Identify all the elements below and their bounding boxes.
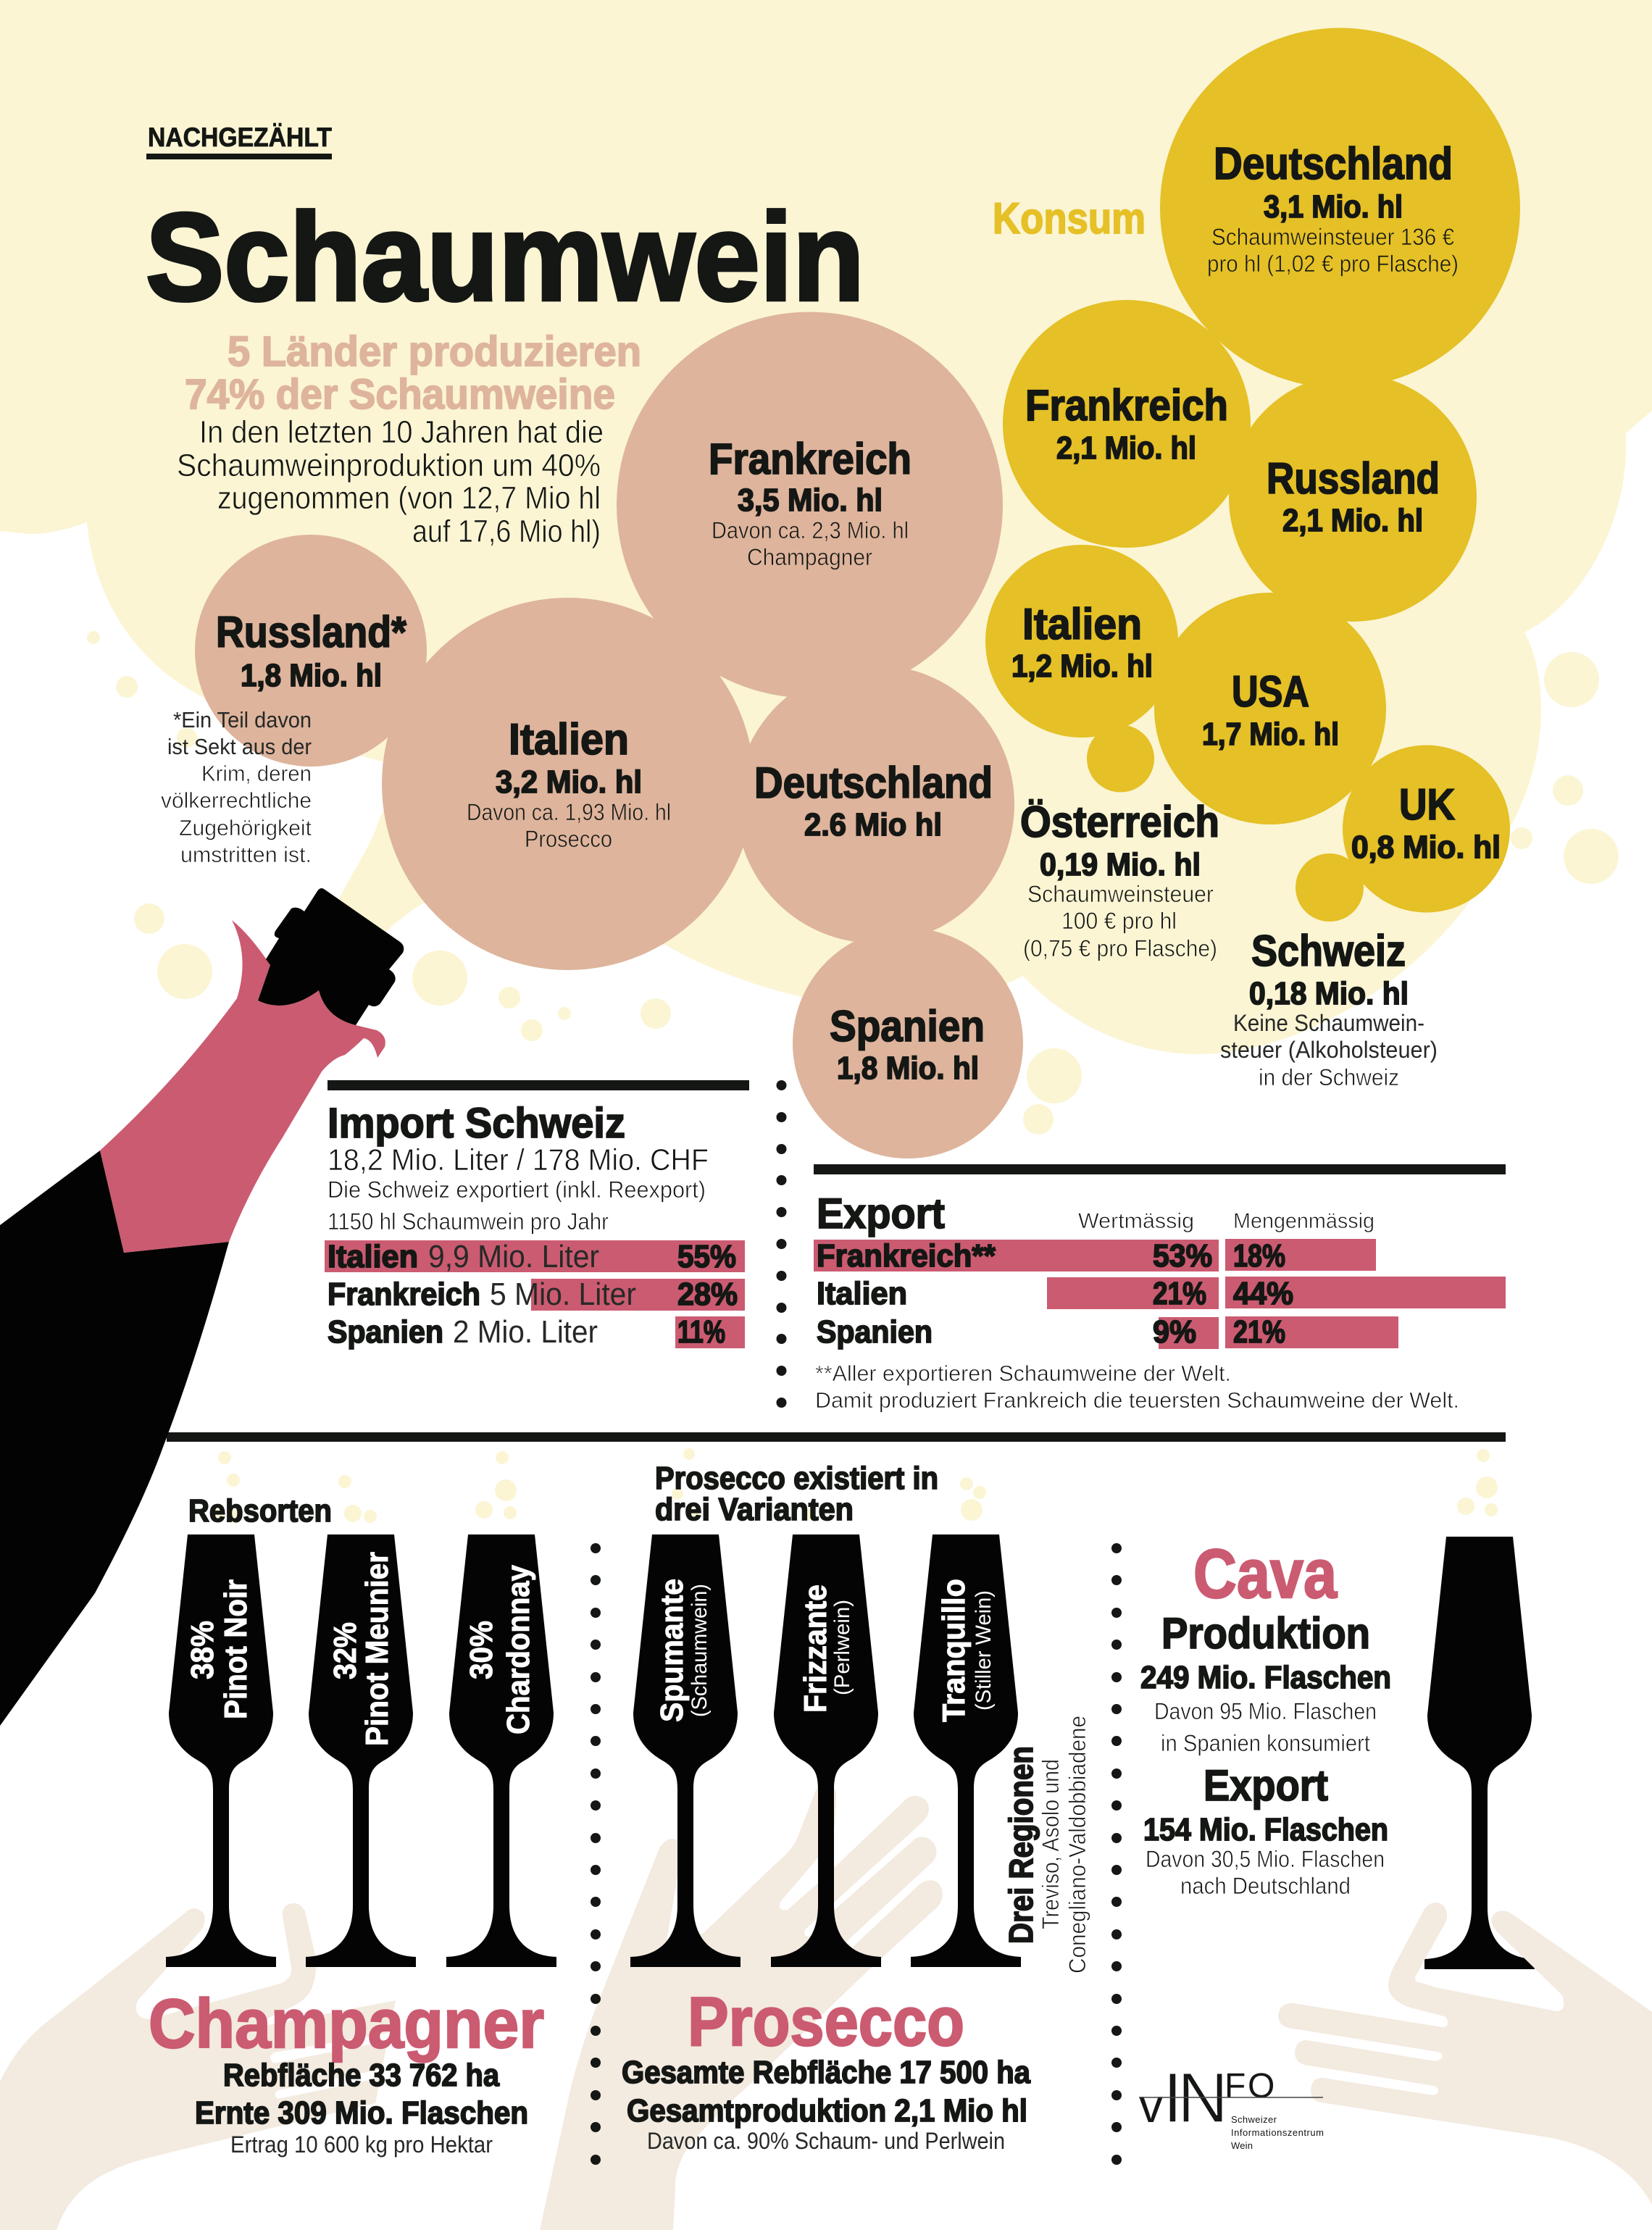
production circle: Italien: Davon ca. 1,93 Mio. hl [467, 799, 671, 825]
text block: Champagner [149, 1985, 544, 2158]
glass: Chardonnay: Chardonnay [501, 1565, 536, 1734]
import bar: Spanien: 11% [677, 1314, 725, 1350]
production circle: Russland: 1,8 Mio. hl [241, 658, 382, 693]
glass: Frizzante [771, 1534, 881, 1967]
consumption circle: Russland: 2,1 Mio. hl [1282, 503, 1423, 538]
Rebsorten label: Rebsorten [188, 1493, 332, 1529]
glass: Frizzante: Frizzante [798, 1584, 833, 1713]
glass: Pinot Noir: Pinot Noir [218, 1579, 254, 1719]
panel: Import Schweiz [325, 1080, 749, 1350]
glass: Pinot Meunier: Pinot Meunier [359, 1552, 395, 1746]
consumption: Schweiz: in der Schweiz [1259, 1064, 1399, 1090]
Russland footnote: Krim, deren [201, 761, 312, 786]
Prosecco varieties label: drei Varianten [655, 1492, 854, 1527]
consumption: Österreich: Schaumweinsteuer [1027, 881, 1214, 907]
Russland footnote [161, 707, 312, 867]
subheading [185, 328, 641, 418]
Russland footnote: umstritten ist. [180, 842, 312, 867]
production circle: Spanien: Spanien [830, 1002, 985, 1051]
glass: Tranquillo [911, 1534, 1021, 1967]
production circle: Frankreich: Davon ca. 2,3 Mio. hl [712, 517, 909, 543]
export row: Italien [817, 1276, 1506, 1311]
consumption circle: Italien: 1,2 Mio. hl [1011, 648, 1153, 684]
export row: Italien: Italien [817, 1276, 907, 1311]
text block: Champagner: Ertrag 10 600 kg pro Hektar [230, 2131, 493, 2158]
Prosecco varieties label: Prosecco existiert in [655, 1461, 938, 1496]
glass: Pinot Meunier [306, 1534, 416, 1967]
export footnote: Damit produziert Frankreich die teuersten Schaumweine der Welt. [815, 1387, 1459, 1413]
production circle: Russland [195, 535, 427, 767]
text block: Prosecco: Gesamte Rebfläche 17 500 ha [622, 2055, 1030, 2090]
production circle: Italien: Italien [509, 715, 629, 764]
production circle: Russland: Russland* [216, 608, 407, 656]
middle hand [540, 1782, 943, 2230]
import bar: Frankreich: 28% [677, 1277, 738, 1312]
vINFO logo: v [1139, 2079, 1163, 2132]
panel: Import Schweiz: Import Schweiz [328, 1100, 625, 1147]
text block: Champagner: Rebfläche 33 762 ha [223, 2058, 499, 2093]
import bar: Italien: 55% [677, 1239, 736, 1274]
glass: Pinot Noir [166, 1534, 276, 1967]
glass: Chardonnay [446, 1534, 556, 1967]
text block: Cava: Export [1203, 1761, 1328, 1810]
production circle: Deutschland [736, 665, 1014, 943]
title: Schaumwein [146, 188, 864, 327]
Drei Regionen text: Conegliano-Valdobbiadene [1064, 1716, 1090, 1974]
text block: Prosecco: Prosecco [688, 1983, 964, 2060]
consumption circle: UK: UK [1399, 780, 1455, 829]
import bar: Frankreich: Frankreich [328, 1277, 480, 1312]
glass: Spumante [630, 1534, 741, 1967]
consumption circle: UK [1343, 745, 1510, 913]
bottle cork [258, 888, 404, 1025]
consumption: Österreich: (0,75 € pro Flasche) [1023, 935, 1217, 961]
intro paragraph: zugenommen (von 12,7 Mio hl [217, 480, 601, 516]
intro paragraph: auf 17,6 Mio hl) [412, 514, 601, 549]
panel: Import Schweiz: 18,2 Mio. Liter / 178 Mio. CHF [328, 1143, 709, 1177]
production circle: Frankreich: Frankreich [709, 435, 911, 483]
panel: Export: Mengenmässig [1233, 1209, 1374, 1233]
consumption circle: Frankreich: 2,1 Mio. hl [1056, 430, 1196, 466]
consumption circle: Italien: Italien [1022, 600, 1142, 648]
consumption circle: USA: 1,7 Mio. hl [1202, 717, 1339, 752]
Russland footnote: Zugehörigkeit [179, 815, 312, 840]
intro text block [177, 328, 641, 549]
bottle body [0, 1151, 229, 1726]
text block: Cava: Davon 95 Mio. Flaschen [1154, 1698, 1377, 1724]
glass: Spumante: Spumante [654, 1579, 690, 1722]
glass: Spumante: (Schaumwein) [688, 1584, 712, 1717]
glass: Chardonnay: 30% [464, 1621, 499, 1679]
cream foam background [0, 0, 1652, 1054]
consumption circle: Deutschland: Deutschland [1214, 139, 1453, 189]
Russland footnote: völkerrechtliche [161, 788, 312, 813]
production circle: Italien: 3,2 Mio. hl [496, 764, 642, 800]
export row: Frankreich: 53% [1153, 1238, 1212, 1274]
export row: Frankreich: Frankreich** [817, 1238, 996, 1274]
consumption: Österreich: 0,19 Mio. hl [1040, 847, 1201, 882]
consumption: Schweiz: Keine Schaumwein- [1233, 1010, 1424, 1036]
dotted divider: left [591, 1543, 601, 2165]
import bar: Italien: Italien [328, 1239, 418, 1274]
dotted divider: import/export [777, 1080, 787, 1408]
subheading: 74% der Schaumweine [185, 371, 615, 418]
consumption circle: Russland [1229, 374, 1477, 622]
Drei Regionen text: Drei Regionen [1002, 1746, 1040, 1944]
glass: Pinot Meunier: 32% [328, 1622, 363, 1679]
import bar: Frankreich [328, 1277, 745, 1312]
consumption: Schweiz: 0,18 Mio. hl [1249, 976, 1409, 1011]
text block: Prosecco [622, 1983, 1030, 2154]
heading: Konsum: Konsum [993, 194, 1146, 243]
intro paragraph [177, 414, 604, 549]
small foam bubbles [87, 631, 1619, 1524]
consumption circle: USA [1154, 593, 1386, 824]
panel: Export [814, 1164, 1506, 1413]
export row: Spanien: 9% [1153, 1314, 1196, 1350]
export row: Spanien: Spanien [817, 1314, 933, 1350]
right hand [1278, 1903, 1652, 2205]
vINFO logo [1139, 2058, 1324, 2151]
text block: Cava: nach Deutschland [1180, 1873, 1351, 1899]
panel: Import Schweiz: Die Schweiz exportiert (inkl. Reexport) [328, 1177, 706, 1203]
consumption circle: Russland: Russland [1267, 454, 1440, 503]
glass: Pinot Noir: 38% [185, 1621, 220, 1679]
Prosecco varieties label [655, 1461, 938, 1527]
export row: Italien: 44% [1233, 1276, 1293, 1311]
panel: Export: Wertmässig [1078, 1209, 1194, 1233]
Drei Regionen text [1002, 1716, 1090, 1974]
glass: Cava [1424, 1537, 1535, 1969]
consumption: Österreich: 100 € pro hl [1061, 908, 1177, 934]
champagne bottle [0, 888, 404, 1726]
glass: Tranquillo: (Stiller Wein) [972, 1590, 996, 1711]
consumption: Österreich [1020, 724, 1219, 961]
consumption: Schweiz [1220, 853, 1438, 1090]
consumption circle: Deutschland [1160, 28, 1520, 388]
consumption circle: Deutschland: Schaumweinsteuer 136 € [1211, 224, 1454, 250]
production circle: Frankreich: Champagner [747, 544, 872, 570]
vINFO logo: IN [1163, 2058, 1228, 2137]
consumption circle: Frankreich [1003, 300, 1251, 548]
vINFO logo: FO [1225, 2067, 1275, 2105]
vINFO logo: Schweizer [1231, 2114, 1277, 2125]
text block: Champagner: Champagner [149, 1985, 544, 2063]
import bar: Spanien: Spanien [328, 1314, 443, 1350]
consumption circle: Deutschland: pro hl (1,02 € pro Flasche) [1207, 251, 1459, 277]
export row: Spanien [817, 1314, 1398, 1350]
production circle: Deutschland: Deutschland [754, 759, 993, 807]
export footnote: **Aller exportieren Schaumweine der Welt. [815, 1361, 1231, 1386]
text block: Cava: Davon 30,5 Mio. Flaschen [1146, 1846, 1385, 1872]
production circle: Spanien: 1,8 Mio. hl [837, 1051, 979, 1086]
Drei Regionen text: Treviso, Asolo und [1038, 1759, 1064, 1929]
text block: Prosecco: Gesamtproduktion 2,1 Mio hl [627, 2093, 1027, 2129]
text block: Cava: Produktion [1161, 1609, 1370, 1658]
text block: Cava: Cava [1193, 1535, 1338, 1613]
consumption circle: Frankreich: Frankreich [1025, 381, 1228, 430]
kicker: Nachgezählt: NACHGEZÄHLT [148, 122, 332, 152]
text block: Prosecco: Davon ca. 90% Schaum- und Perlwein [647, 2128, 1005, 2154]
consumption circle: Italien [985, 545, 1178, 738]
import bar: Frankreich: 5 Mio. Liter [490, 1277, 636, 1312]
text block: Champagner: Ernte 309 Mio. Flaschen [195, 2095, 528, 2131]
import bar: Spanien [328, 1314, 745, 1350]
import bar: Italien: 9,9 Mio. Liter [428, 1239, 599, 1274]
production circle: Italien: Prosecco [525, 826, 612, 852]
export row: Frankreich [814, 1238, 1376, 1274]
consumption: Schweiz: Schweiz [1251, 927, 1406, 975]
Russland footnote: ist Sekt aus der [167, 734, 312, 759]
production circle: Frankreich: 3,5 Mio. hl [738, 483, 883, 518]
Russland footnote: *Ein Teil davon [173, 707, 312, 732]
export row: Spanien: 21% [1233, 1314, 1285, 1350]
glass: Frizzante: (Perlwein) [830, 1600, 854, 1695]
text block: Cava: 154 Mio. Flaschen [1143, 1812, 1388, 1847]
consumption circle: UK: 0,8 Mio. hl [1351, 830, 1501, 865]
text block: Cava: 249 Mio. Flaschen [1140, 1660, 1391, 1695]
consumption circle: Deutschland: 3,1 Mio. hl [1264, 189, 1403, 225]
panel: Import Schweiz: 1150 hl Schaumwein pro Jahr [328, 1208, 609, 1235]
panel: Export: Export [817, 1190, 945, 1237]
text block: Cava [1140, 1535, 1391, 1899]
left hand [0, 1903, 396, 2230]
export footnote [815, 1361, 1459, 1413]
subheading: 5 Länder produzieren [228, 328, 641, 375]
import bar: Spanien: 2 Mio. Liter [453, 1314, 598, 1350]
dotted divider: right [1111, 1543, 1122, 2165]
consumption: Österreich: Österreich [1020, 798, 1219, 846]
import bar: Italien [325, 1239, 745, 1274]
consumption: Schweiz: steuer (Alkoholsteuer) [1220, 1037, 1438, 1063]
text block: Cava: in Spanien konsumiert [1161, 1730, 1370, 1756]
production circle: Spanien [793, 928, 1023, 1158]
glass: Tranquillo: Tranquillo [936, 1579, 972, 1722]
production circle: Frankreich [617, 312, 1003, 698]
production circle: Italien [382, 598, 754, 970]
intro paragraph: In den letzten 10 Jahren hat die [199, 414, 604, 450]
export row: Italien: 21% [1153, 1276, 1206, 1311]
consumption circle: USA: USA [1232, 667, 1309, 716]
intro paragraph: Schaumweinproduktion um 40% [177, 448, 601, 483]
vINFO logo: Informationszentrum [1231, 2127, 1324, 2138]
section rule [167, 1432, 1506, 1442]
bottle foil [100, 920, 385, 1253]
production circle: Deutschland: 2.6 Mio hl [804, 807, 942, 843]
export row: Frankreich: 18% [1233, 1238, 1285, 1274]
vINFO logo: Wein [1231, 2140, 1253, 2151]
